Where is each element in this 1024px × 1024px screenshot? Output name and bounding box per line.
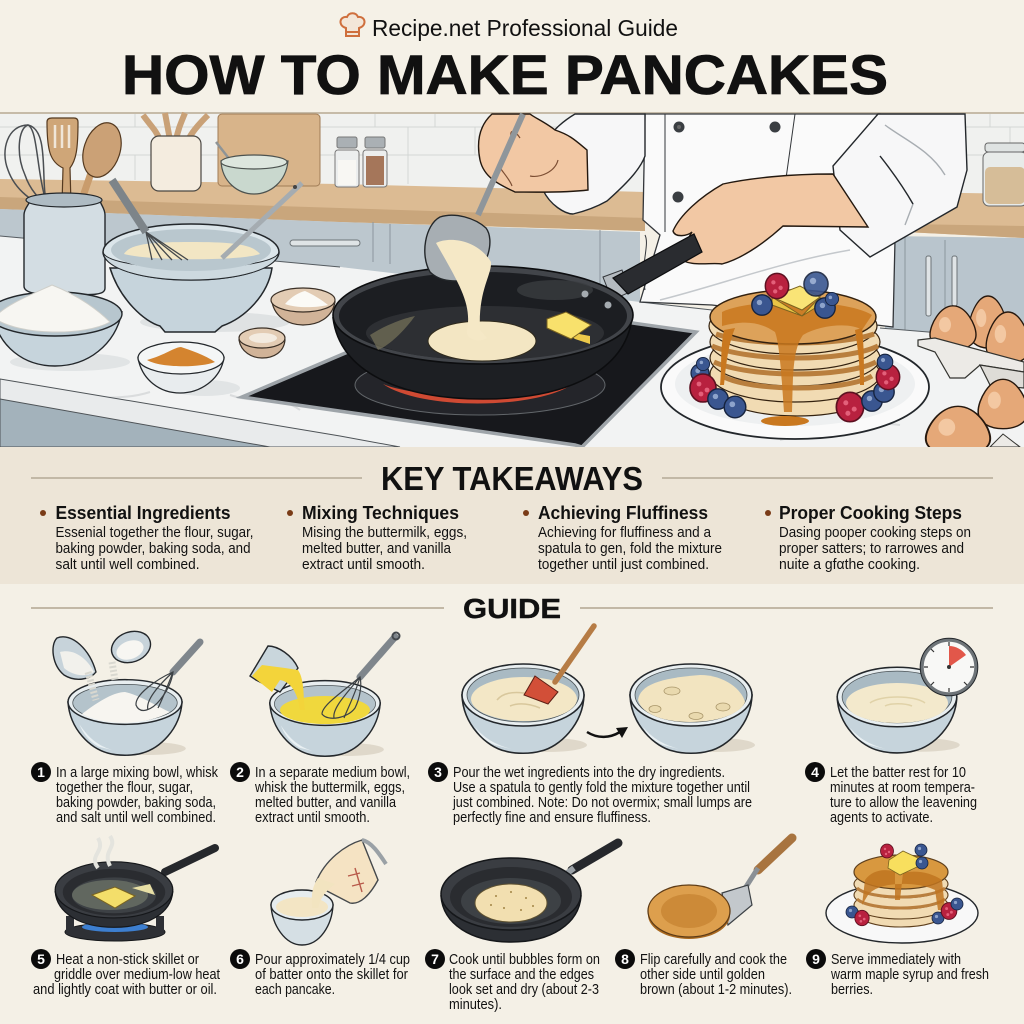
- takeaway: essential ingredients: [40, 503, 254, 573]
- step 5 text: and lightly coat with butter or oil.: [33, 981, 217, 998]
- number badge 1: [31, 762, 51, 782]
- step 8: [615, 838, 792, 998]
- step 1 text: [56, 764, 218, 826]
- brand line: Recipe.net Professional Guide: [372, 15, 678, 41]
- takeaway: mixing techniques: Mising the buttermilk, eggs,: [302, 524, 467, 541]
- step 9: [806, 844, 989, 998]
- step 3 text: [452, 764, 752, 826]
- right arm and hand: [673, 174, 868, 264]
- step 3 text: Use a spatula to gently fold the mixture together until: [453, 779, 750, 796]
- step 8 text: brown (about 1-2 minutes).: [640, 981, 792, 998]
- number badge 5: 5: [37, 951, 45, 967]
- step 1 text: and salt until well combined.: [56, 809, 216, 826]
- number badge 2: 2: [236, 764, 244, 780]
- takeaway: proper cooking steps: [765, 503, 971, 573]
- number badge 7: [425, 949, 445, 969]
- number badge 3: 3: [434, 764, 442, 780]
- icon: arrow: [587, 727, 628, 738]
- icon: mixed batter bowl: [630, 664, 755, 753]
- left sleeve: [543, 114, 645, 214]
- step 1 text: baking powder, baking soda,: [56, 794, 216, 811]
- step 2 text: whisk the buttermilk, eggs,: [254, 779, 405, 796]
- number badge 2: [230, 762, 250, 782]
- number badge 5: [31, 949, 51, 969]
- pancake batter: [428, 321, 536, 361]
- number badge 3: [428, 762, 448, 782]
- guide heading: GUIDE: [463, 593, 561, 624]
- header: [0, 0, 1024, 114]
- hero kitchen illustration: [0, 113, 1024, 456]
- berries: [690, 272, 900, 422]
- small spice bowl: [239, 328, 285, 358]
- takeaway: achieving fluffiness: Achieving Fluffiness: [538, 503, 708, 523]
- step 1 text: together the flour, sugar,: [56, 779, 193, 796]
- step 4 text: agents to activate.: [830, 809, 933, 826]
- step 2 text: [254, 764, 410, 826]
- takeaway: achieving fluffiness: Achieving for fluffiness and a: [538, 524, 712, 541]
- mixing bowl: [103, 180, 302, 332]
- step 5: [31, 836, 221, 998]
- step 8 text: Flip carefully and cook the: [640, 951, 787, 968]
- number badge 9: 9: [812, 951, 820, 967]
- step 5 text: [33, 951, 221, 998]
- panel: key takeaways: [0, 447, 1024, 584]
- takeaway: mixing techniques: melted butter, and vanilla: [302, 540, 452, 557]
- step 6: [230, 840, 410, 998]
- number badge 7: 7: [431, 951, 439, 967]
- right jar: [983, 143, 1024, 206]
- takeaway: achieving fluffiness: together until just combined.: [538, 556, 709, 573]
- induction stove: [242, 300, 696, 447]
- takeaway: essential ingredients: Essenial together the flour, sugar,: [56, 524, 254, 541]
- takeaway: achieving fluffiness: spatula to gen, fold the mixture: [538, 540, 722, 557]
- number badge 8: [615, 949, 635, 969]
- icon: wet ingredients bowl: [250, 632, 400, 756]
- step 9 text: [830, 951, 989, 998]
- plated pancake stack: [661, 272, 929, 439]
- icon: skillet on burner: [55, 836, 215, 941]
- chef coat: [640, 114, 895, 327]
- takeaway: mixing techniques: Mixing Techniques: [302, 503, 459, 523]
- step 7 text: minutes).: [449, 996, 502, 1013]
- chef: [478, 114, 967, 327]
- cabinets: [0, 209, 640, 310]
- right sleeve: [833, 114, 967, 257]
- takeaway: proper cooking steps: nuite a gfαthe cooking.: [779, 556, 920, 573]
- icon: flipping pancake with spatula: [648, 838, 792, 939]
- step 8 text: other side until golden: [640, 966, 765, 983]
- step 2 text: extract until smooth.: [255, 809, 370, 826]
- shelf crock: [143, 113, 208, 191]
- icon: flour bowl and whisk: [53, 626, 200, 755]
- icon: pancake cooking in skillet: [441, 843, 618, 942]
- step 9 text: warm maple syrup and fresh: [830, 966, 989, 983]
- step 4 text: Let the batter rest for 10: [830, 764, 966, 781]
- small syrup bowl: [138, 342, 240, 396]
- step 6 text: [255, 951, 410, 998]
- step 9 text: Serve immediately with: [831, 951, 961, 968]
- step 3 text: perfectly fine and ensure fluffiness.: [453, 809, 651, 826]
- takeaway: mixing techniques: [287, 503, 467, 573]
- syrup: [722, 302, 872, 412]
- takeaway: achieving fluffiness: [523, 503, 722, 573]
- left hand: [478, 114, 588, 192]
- step 7 text: Cook until bubbles form on: [449, 951, 600, 968]
- marble counter: [0, 236, 1024, 447]
- step 2: [230, 632, 410, 826]
- takeaway: essential ingredients: salt until well combined.: [56, 556, 200, 573]
- step 4 text: ture to allow the leavening: [830, 794, 977, 811]
- step 7 text: look set and dry (about 2-3: [449, 981, 599, 998]
- takeaway: proper cooking steps: Dasing pooper cooking steps on: [779, 524, 971, 541]
- icon: resting batter bowl: [837, 667, 960, 753]
- utensil jar: [5, 118, 128, 295]
- number badge 8: 8: [621, 951, 629, 967]
- step 4 text: minutes at room tempera-: [830, 779, 975, 796]
- step 7 text: [449, 951, 600, 1013]
- ladle and batter stream: [425, 114, 523, 340]
- title: HOW TO MAKE PANCAKES: [122, 43, 888, 106]
- step 9 text: berries.: [831, 981, 873, 998]
- step 7: [425, 843, 618, 1013]
- step 6 text: Pour approximately 1/4 cup: [255, 951, 410, 968]
- frying pan: [333, 234, 702, 399]
- number badge 4: [805, 762, 825, 782]
- takeaway: proper cooking steps: proper satters; to rarrowes and: [779, 540, 964, 557]
- number badge 4: 4: [811, 764, 819, 780]
- takeaway: proper cooking steps: Proper Cooking Steps: [779, 503, 962, 523]
- number badge 6: 6: [236, 951, 244, 967]
- step 8 text: [640, 951, 792, 998]
- cutting board: [218, 114, 320, 186]
- step 3 text: Pour the wet ingredients into the dry ingredients.: [453, 764, 725, 781]
- icon: folding batter with spatula: [462, 626, 594, 753]
- step 6 text: of batter onto the skillet for: [255, 966, 408, 983]
- step 3 text: just combined. Note: Do not overmix; small lumps are: [452, 794, 752, 811]
- takeaway: essential ingredients: baking powder, baking soda, and: [56, 540, 250, 557]
- icon: chef hat: [340, 13, 365, 36]
- butter pat: [547, 312, 591, 344]
- step 1 text: In a large mixing bowl, whisk: [56, 764, 218, 781]
- icon: served pancakes: [826, 844, 978, 943]
- icon: pouring batter from measuring cup: [271, 840, 386, 945]
- heading: key takeaways: KEY TAKEAWAYS: [381, 460, 643, 497]
- salt and spice shakers: [335, 137, 387, 187]
- back counter: [0, 179, 645, 231]
- flour bowl: [0, 285, 130, 371]
- step 3: [428, 626, 755, 826]
- step 7 text: the surface and the edges: [449, 966, 594, 983]
- lower cabinet: [0, 379, 400, 447]
- step 4: [805, 638, 978, 826]
- small salt bowl: [271, 288, 335, 325]
- number badge 9: [806, 949, 826, 969]
- small sage bowl: [216, 142, 288, 194]
- number badge 6: [230, 949, 250, 969]
- step 4 text: [830, 764, 977, 826]
- wall tiles: [0, 114, 1024, 199]
- step 2 text: In a separate medium bowl,: [255, 764, 410, 781]
- takeaway: mixing techniques: extract until smooth.: [302, 556, 425, 573]
- step 6 text: each pancake.: [255, 981, 335, 998]
- butter: [772, 286, 820, 316]
- takeaway: essential ingredients: Essential Ingredients: [56, 503, 230, 523]
- step 1: [31, 626, 218, 826]
- step 5 text: griddle over medium-low heat: [54, 966, 221, 983]
- eggs and carton: [918, 296, 1024, 456]
- icon: timer: [920, 638, 978, 696]
- step 5 text: Heat a non-stick skillet or: [56, 951, 199, 968]
- number badge 1: 1: [37, 764, 45, 780]
- step 2 text: melted butter, and vanilla: [255, 794, 397, 811]
